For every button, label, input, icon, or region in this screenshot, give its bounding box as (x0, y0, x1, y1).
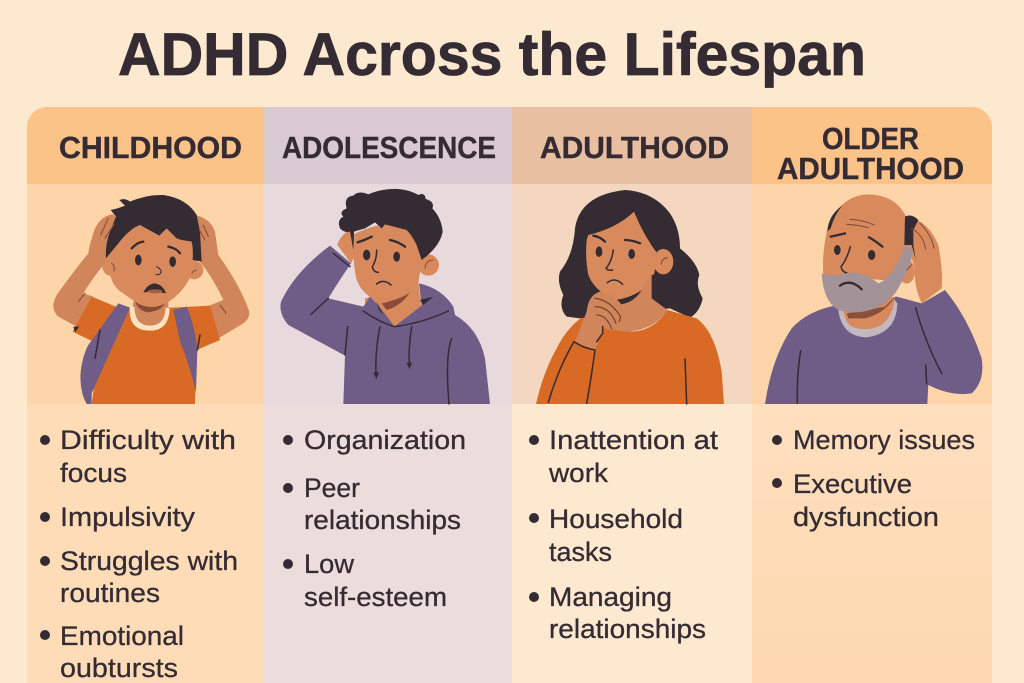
illustration: child holding head (53, 195, 249, 404)
card backgrounds (27, 107, 992, 683)
list: adolescence: relationships (304, 505, 461, 535)
illustration: woman thinking (536, 190, 724, 404)
list: childhood: Difficulty with (60, 425, 236, 455)
list: childhood: focus (60, 458, 127, 488)
list: adulthood (529, 425, 719, 644)
list: adolescence (283, 425, 466, 612)
heading: adulthood: ADULTHOOD (540, 130, 729, 165)
list: childhood: routines (60, 578, 160, 608)
heading: older adulthood (777, 121, 964, 186)
list: adolescence: self-esteem (304, 582, 447, 612)
list: childhood: oubtursts (60, 653, 178, 683)
heading: older adulthood: OLDER (822, 121, 919, 156)
list: older adulthood (772, 425, 975, 532)
list: adulthood: Managing (549, 582, 672, 612)
heading: childhood: CHILDHOOD (59, 130, 242, 165)
list: adolescence: Peer (304, 473, 360, 503)
list: adulthood: relationships (549, 614, 706, 644)
list: older adulthood: Executive (793, 469, 912, 499)
list: adulthood: Household (549, 504, 683, 534)
list: adolescence: Organization (304, 425, 466, 455)
list: childhood: Impulsivity (60, 502, 196, 532)
list: childhood: Emotional (60, 621, 184, 651)
list: adulthood: Inattention at (549, 425, 719, 455)
heading: adolescence: ADOLESCENCE (282, 130, 496, 165)
list: older adulthood: Memory issues (793, 425, 975, 455)
list: adulthood: tasks (549, 537, 612, 567)
list: adolescence: Low (304, 549, 355, 579)
list: older adulthood: dysfunction (793, 502, 939, 532)
illustration: teen in hoodie (280, 189, 490, 404)
list: childhood: Struggles with (60, 546, 238, 576)
list: adulthood: work (548, 458, 609, 488)
illustration: older man (765, 194, 982, 404)
title: ADHD Across the Lifespan (118, 21, 866, 88)
heading: older adulthood: ADULTHOOD (777, 151, 964, 186)
list: childhood (40, 425, 238, 683)
